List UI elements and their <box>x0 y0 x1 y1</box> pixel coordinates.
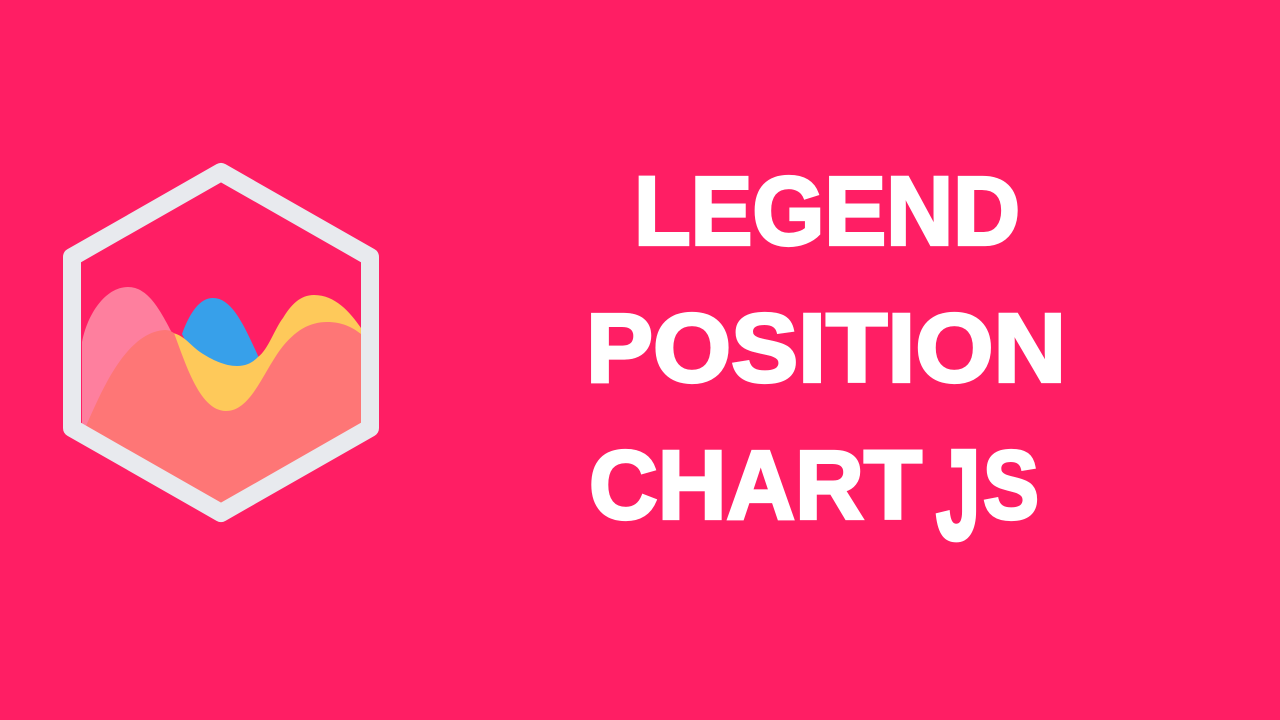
title line 3: CHART <box>589 430 922 540</box>
title line 3: J <box>936 424 980 567</box>
icon: Chart.js hexagon logo <box>72 172 370 513</box>
hexagon outline <box>72 172 370 513</box>
yellow area <box>173 295 361 420</box>
coral area <box>86 322 361 505</box>
title line 1: LEGEND <box>634 156 1020 266</box>
title line 2: POSITION <box>586 294 1066 402</box>
pink area <box>82 287 172 428</box>
title line 3 <box>589 424 1039 567</box>
title line 3: S <box>983 430 1039 540</box>
blue area <box>182 298 259 375</box>
title <box>586 156 1066 567</box>
